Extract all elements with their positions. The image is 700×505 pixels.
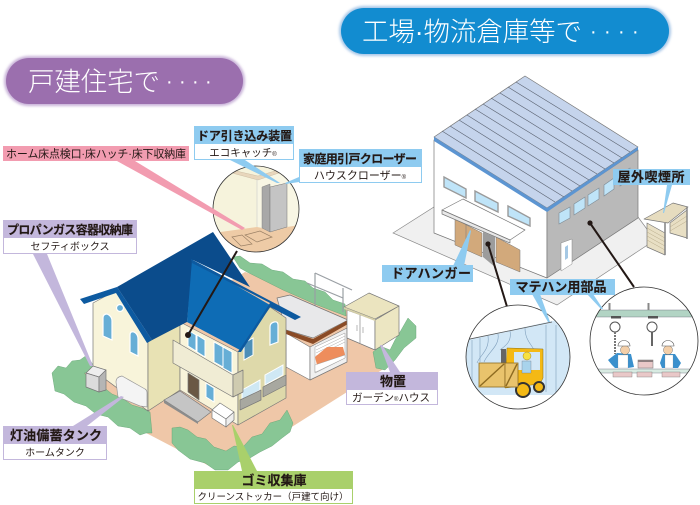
leader: floor detail to house — [185, 251, 237, 338]
garbage storage — [212, 403, 234, 427]
entrance step — [164, 391, 211, 422]
parts boxes — [613, 360, 680, 377]
house building — [80, 232, 301, 425]
front windows — [444, 177, 530, 226]
factory leader lines — [485, 220, 634, 310]
upper windows — [188, 330, 283, 402]
callout pointers — [33, 160, 672, 471]
smoking shelter — [644, 203, 688, 255]
label: storage shed: ガーデン®ハウス — [352, 391, 430, 404]
hoists — [608, 303, 658, 354]
label: door pull-in device: ドア引き込み装置 — [197, 128, 292, 143]
label: house closer: ハウスクローザー® — [314, 169, 407, 182]
factory ground — [393, 207, 655, 305]
clothes pole — [307, 273, 352, 312]
title: detached houses: ···· — [166, 71, 212, 93]
door hanger canopy — [442, 199, 525, 243]
right hedge — [373, 318, 416, 370]
label: material handling parts: マテハン用部品 — [516, 280, 606, 294]
label: garbage storage — [194, 471, 353, 504]
car — [315, 347, 345, 365]
label: garbage storage: クリーンストッカー（戸建て向け） — [198, 491, 348, 503]
factory doors — [455, 219, 520, 272]
factory walls — [434, 140, 547, 278]
label: door pull-in device: エコキャッチ® — [209, 147, 277, 159]
label: kerosene tank: ホームタンク — [25, 447, 85, 459]
conveyor workers detail circle — [588, 287, 700, 395]
label: kerosene tank: 灯油備蓄タンク — [10, 428, 102, 443]
worker left — [608, 340, 634, 368]
crate — [479, 363, 505, 387]
title: factories and warehouses: 工場·物流倉庫等で — [362, 17, 582, 47]
shutter stripes — [316, 336, 345, 356]
label: propane gas storage: プロパンガス容器収納庫 — [7, 222, 133, 237]
ground — [60, 272, 385, 470]
door — [188, 373, 199, 400]
title: detached houses: 戸建住宅で — [28, 67, 160, 97]
label: floor inspection hatch: ホーム床点検口·床ハッチ·床下収納庫 — [6, 146, 186, 160]
label: house closer: 家庭用引戸クローザー — [303, 151, 417, 166]
forklift detail circle — [466, 304, 570, 410]
worker right — [660, 340, 681, 368]
label: garbage storage: ゴミ収集庫 — [241, 473, 307, 488]
title: factories and warehouses — [339, 6, 671, 56]
garage — [277, 295, 348, 380]
label: house closer — [299, 149, 422, 182]
label: propane gas storage: セフティボックス — [30, 241, 110, 253]
storage shed — [344, 293, 399, 350]
strip curtain folds — [472, 325, 556, 395]
label: door hanger: ドアハンガー — [391, 266, 471, 281]
driver — [523, 352, 531, 360]
label: outdoor smoking area: 屋外喫煙所 — [618, 170, 684, 184]
balcony — [173, 340, 233, 397]
label: kerosene tank — [3, 426, 107, 460]
factory — [393, 76, 688, 305]
label: storage shed: 物置 — [380, 374, 406, 389]
roof — [80, 287, 152, 343]
roof ribs — [442, 82, 630, 202]
side door — [561, 239, 572, 271]
back hedge — [233, 256, 346, 316]
propane gas storage box — [86, 366, 106, 392]
front hedge — [172, 410, 293, 470]
label: storage shed — [346, 372, 438, 404]
side windows — [559, 168, 630, 224]
left hedge — [52, 355, 152, 435]
forklift — [505, 348, 543, 388]
kerosene tank — [116, 376, 147, 407]
balcony rails — [240, 390, 261, 410]
label: propane gas storage — [3, 220, 137, 254]
title: detached houses — [4, 56, 245, 106]
title: factories and warehouses: ···· — [590, 21, 639, 43]
arched windows — [103, 304, 278, 356]
label: door pull-in device — [194, 126, 294, 160]
indoor detail circle — [213, 166, 300, 260]
factory roof — [434, 76, 638, 208]
